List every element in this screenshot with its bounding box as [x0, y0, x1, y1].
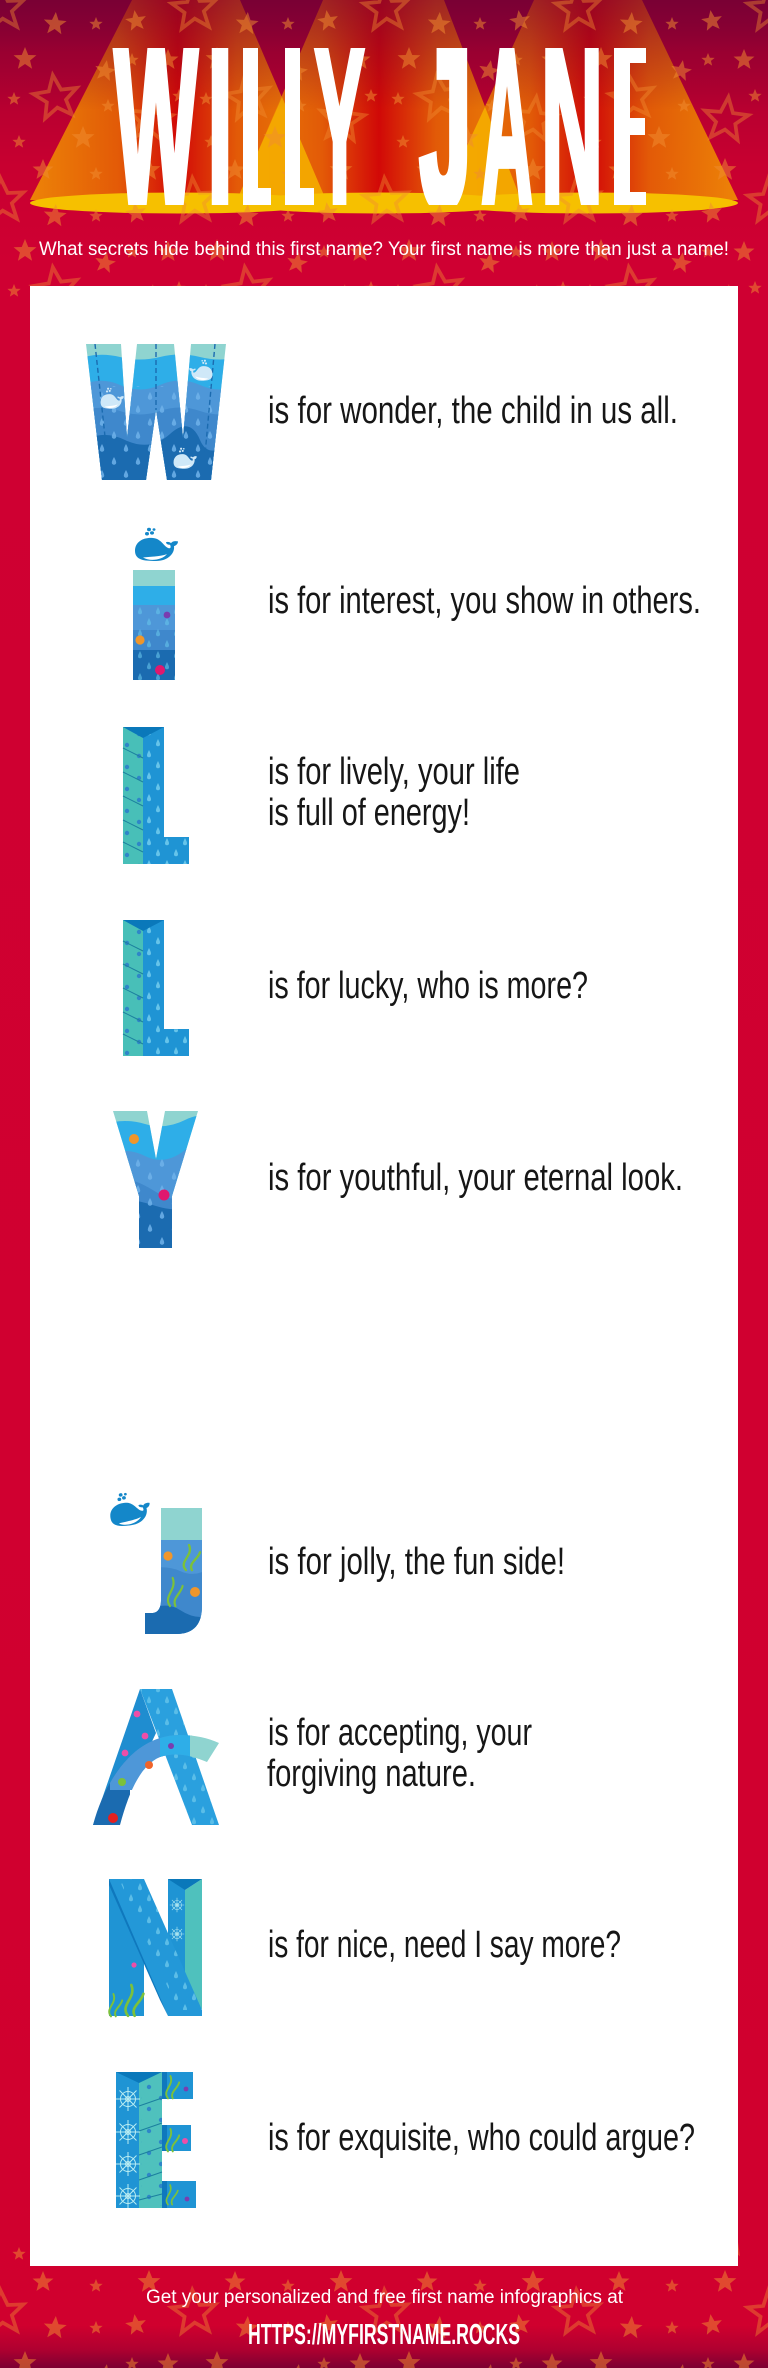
text: N: is for nice, need I say more?	[268, 1924, 621, 1966]
panel: white content area	[30, 286, 738, 2266]
letter N	[109, 1879, 202, 2016]
text: A: is for accepting, your	[268, 1712, 532, 1754]
title: L	[239, 0, 275, 254]
footer URL: HTTPS://MYFIRSTNAME.ROCKS	[248, 2319, 520, 2351]
title: L	[281, 0, 317, 254]
title: W	[114, 0, 198, 254]
title: I	[205, 0, 235, 254]
text: L: is for lively, your life	[268, 751, 520, 793]
icon: whale	[107, 1489, 152, 1528]
text: J: is for jolly, the fun side!	[268, 1541, 565, 1583]
text: L	[268, 751, 520, 834]
title: A	[481, 0, 533, 254]
letter W	[86, 344, 226, 480]
text: A	[267, 1712, 532, 1795]
letter A	[90, 1689, 222, 1830]
text: A: forgiving nature.	[267, 1753, 476, 1795]
letter J with whale	[110, 1492, 202, 1634]
letter I with whale	[133, 528, 178, 680]
spotlights	[0, 0, 768, 214]
title	[112, 48, 646, 205]
text: L: is full of energy!	[268, 792, 470, 834]
text: L second: is for lucky, who is more?	[268, 965, 588, 1007]
footer text: Get your personalized and free first name infographics at	[146, 2287, 624, 2308]
text: E	[610, 0, 650, 254]
title: J	[420, 0, 471, 254]
title: N	[541, 0, 603, 254]
letter E	[116, 2072, 196, 2208]
letter L	[123, 727, 189, 864]
icon: whale	[135, 528, 178, 561]
title: Y	[314, 0, 365, 254]
subtitle: What secrets hide behind this first name? Your first name is more than just a name!	[39, 239, 729, 260]
letter Y	[113, 1111, 198, 1248]
letter L second	[123, 920, 189, 1056]
